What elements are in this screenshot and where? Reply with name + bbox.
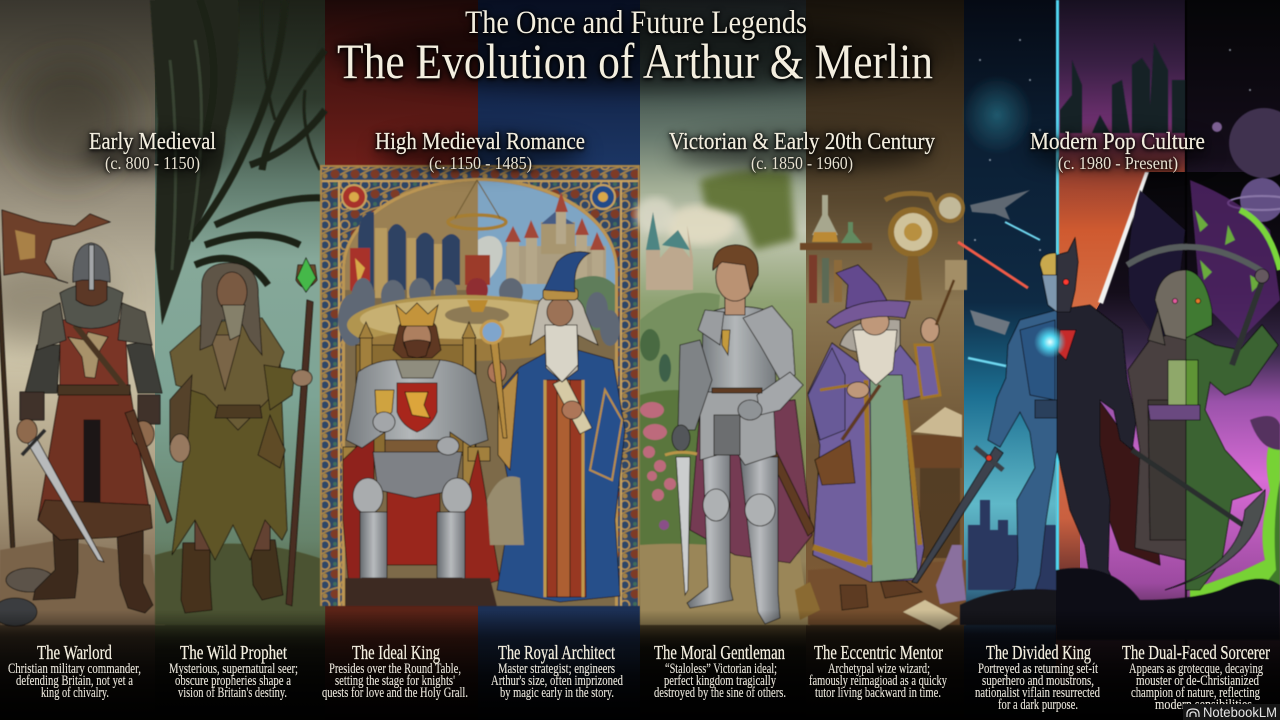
figure: moral gentleman (665, 245, 815, 624)
era heading: early medieval: Early Medieval (89, 129, 216, 155)
caption: the ideal king: setting the stage for knights' (335, 673, 455, 689)
caption: the wild prophet: Mysterious, supernatural seer; (169, 661, 298, 677)
dark skull boulders (960, 568, 1280, 640)
caption: the dual-faced sorcerer: modern sensibilities. (1155, 697, 1255, 713)
caption: the ideal king: Presides over the Round Table, (329, 661, 461, 677)
caption: the divided king: for a dark purpose. (998, 697, 1078, 713)
caption: the divided king (975, 642, 1101, 713)
caption: the warlord (8, 642, 141, 701)
space backdrop: nebula, starfighters, lasers (958, 39, 1251, 590)
panel: study with eccentric mentor (795, 193, 967, 630)
banner: lion flag (0, 210, 110, 610)
caption: the royal architect (491, 642, 624, 701)
caption: the moral gentleman: “Staloless” Victorian ideal; (665, 661, 777, 677)
figure: ideal king on throne (343, 303, 500, 604)
era heading: early medieval: (c. 800 - 1150) (105, 153, 200, 174)
caption: the ideal king: quests for love and the Holy Grall. (322, 685, 468, 701)
diagonal beam (1098, 172, 1149, 304)
caption: the ideal king (322, 642, 468, 701)
era heading: victorian (669, 129, 935, 174)
panel: high medieval illuminated manuscript (320, 165, 640, 606)
kicker title: The Once and Future Legends (465, 5, 807, 41)
ornate border frame (320, 165, 640, 606)
caption: the divided king: superhero and moustrons, (982, 673, 1094, 689)
era heading: high medieval romance (375, 129, 585, 174)
caption: the divided king: The Divided King (986, 642, 1091, 664)
figure: royal architect wizard (481, 252, 625, 602)
purple panel city skyline (1060, 43, 1185, 133)
title block (337, 5, 933, 89)
caption: the divided king: Portreyed as returning set-ít (978, 661, 1098, 677)
era heading: victorian: Victorian & Early 20th Century (669, 129, 935, 155)
caption: the royal architect: Master strategist; engineers (498, 661, 615, 677)
figure: divided king (912, 238, 1160, 618)
staff with orb (481, 321, 507, 438)
caption: the warlord: king of chivalry. (41, 685, 109, 701)
era heading: modern pop culture (1030, 129, 1205, 174)
figure: wild prophet (170, 258, 317, 613)
panel: modern pop culture sci-fi (912, 0, 1280, 720)
medallions (342, 185, 615, 209)
green flames (1190, 416, 1280, 640)
main title: The Evolution of Arthur & Merlin (337, 33, 933, 89)
roses (640, 402, 676, 616)
era heading: modern pop culture: (c. 1980 - Present) (1058, 153, 1178, 174)
panel: victorian garden with moral gentleman (635, 170, 815, 625)
figure: eccentric mentor (808, 265, 954, 610)
round table with knights (338, 255, 620, 361)
caption: the wild prophet: The Wild Prophet (180, 642, 287, 664)
caption: the moral gentleman: destroyed by the sine of others. (654, 685, 786, 701)
caption: the eccentric mentor: famously reimagioad as a quicky (809, 673, 948, 689)
caption: the moral gentleman (654, 642, 786, 701)
gnarled tree (150, 0, 325, 325)
caption: the wild prophet: vision of Britain's destiny. (178, 685, 287, 701)
era heading: early medieval (89, 129, 216, 174)
figure: dual-faced sorcerer (1127, 247, 1278, 590)
caption: the eccentric mentor: tutor living backward in time. (815, 685, 941, 701)
shelves and flasks (800, 195, 872, 303)
caption: the royal architect: The Royal Architect (498, 642, 615, 664)
era heading: high medieval romance: (c. 1150 - 1485) (429, 153, 532, 174)
bottom darkening band (0, 610, 1280, 720)
panel: early medieval warlord (0, 210, 172, 626)
heading halos (82, 19, 1208, 173)
potion and parchment (795, 545, 966, 630)
caption: the warlord: The Warlord (37, 642, 112, 664)
caption: the eccentric mentor: The Eccentric Mentor (814, 642, 943, 664)
caption: the ideal king: The Ideal King (352, 642, 440, 664)
sword (912, 447, 1003, 583)
caption: the eccentric mentor (809, 642, 948, 701)
dark swirl and leaves (1129, 180, 1280, 360)
caption: the royal architect: by magic early in the story. (500, 685, 614, 701)
desk and book (910, 407, 962, 558)
caption: the warlord: defending Britain, not yet a (16, 673, 133, 689)
era heading: high medieval romance: High Medieval Romance (375, 129, 585, 155)
era heading: modern pop culture: Modern Pop Culture (1030, 129, 1205, 155)
caption: the wild prophet (169, 642, 298, 701)
castle (505, 192, 606, 288)
chandelier (448, 180, 506, 229)
figure: warlord (17, 243, 172, 613)
sword (22, 430, 104, 562)
panel: forest with wild prophet (150, 0, 325, 625)
caption: the warlord: Christian military commander, (8, 661, 141, 677)
caption: the dual-faced sorcerer (1122, 642, 1270, 713)
caption: the eccentric mentor: Archetypal wize wizard; (828, 661, 930, 677)
caption: the royal architect: Arthur's size, often imprizoned (491, 673, 624, 689)
clockwork (885, 193, 967, 300)
planets (1212, 108, 1280, 222)
caption: the wild prophet: obscure propheries shape a (175, 673, 291, 689)
caption: the moral gentleman: The Moral Gentleman (654, 642, 785, 664)
era heading: victorian: (c. 1850 - 1960) (751, 153, 853, 174)
clouds, castle, tree, hills (635, 170, 810, 625)
arched scene (338, 180, 620, 606)
city skyline (968, 500, 1056, 590)
caption: the moral gentleman: perfect kingdom tragically (664, 673, 777, 689)
caption: the divided king: nationalist viflain resurrected (975, 685, 1101, 701)
